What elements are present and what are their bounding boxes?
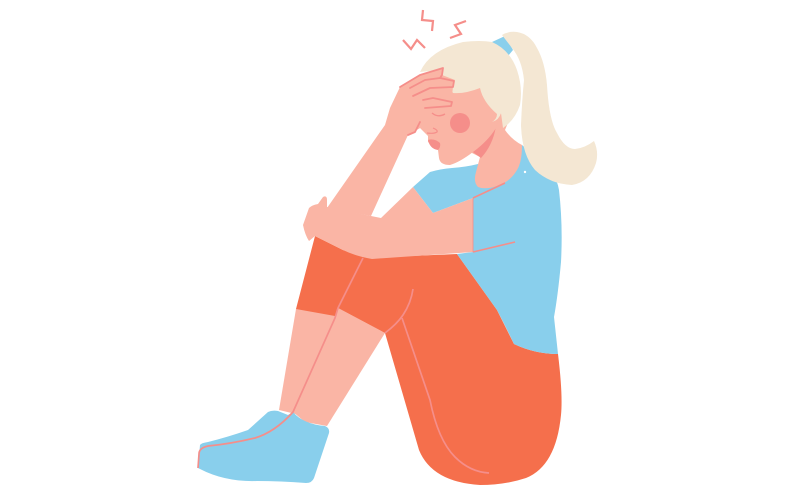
shorts: body	[338, 254, 562, 485]
lower arm and hand on knee	[303, 187, 473, 259]
ponytail	[502, 32, 597, 185]
hair	[420, 41, 521, 128]
hand finger lines	[400, 68, 454, 135]
sleeve lines	[473, 183, 515, 252]
mouth	[428, 139, 440, 150]
shoe	[198, 411, 329, 483]
face	[420, 85, 500, 165]
neck shadow	[470, 126, 496, 158]
shorts: back leg	[296, 236, 372, 316]
eye	[432, 113, 445, 116]
neck	[470, 108, 522, 188]
leg seam lines	[198, 258, 489, 473]
white shirt dot	[524, 171, 526, 173]
nose	[427, 128, 437, 133]
back leg	[279, 309, 340, 415]
icon: stress marks	[403, 10, 466, 49]
forearm and hand	[385, 68, 455, 135]
ponytail tie	[492, 36, 513, 56]
cheek	[450, 113, 470, 133]
shorts	[296, 236, 562, 485]
upper arm	[327, 125, 420, 216]
front leg	[293, 308, 385, 426]
shirt	[413, 145, 562, 354]
